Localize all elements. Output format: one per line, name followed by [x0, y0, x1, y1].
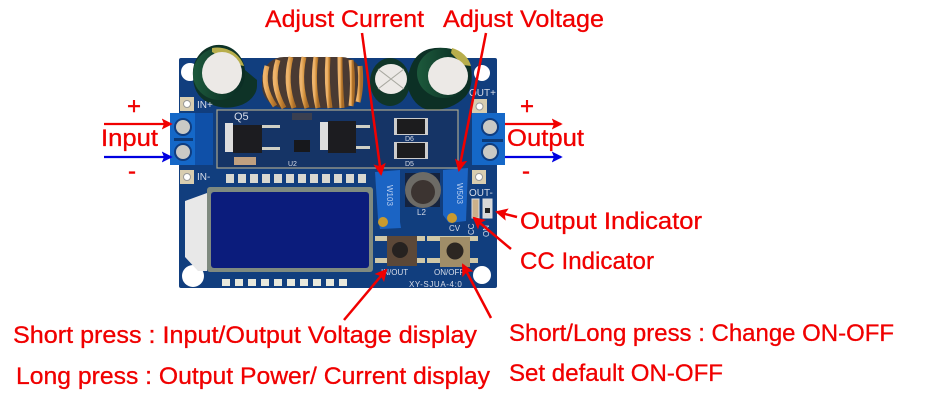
text: IN/OUT long press: Long press : Output Power/ Current display — [16, 363, 490, 390]
IN+ and IN- pads with silk labels — [180, 97, 213, 184]
board substrate — [179, 58, 497, 288]
LCD backlight tab — [185, 193, 207, 271]
arrow: Output Indicator — [497, 212, 517, 217]
IN/OUT push button — [375, 236, 425, 277]
diodes D6 and D5: D5 — [405, 161, 414, 168]
small resistor — [234, 157, 256, 165]
top LCD pin row — [226, 174, 366, 183]
voltage trimmer potentiometer: W503 — [455, 183, 464, 204]
input label — [101, 93, 158, 185]
text: ON/OFF short or long press: Short/Long press : Change ON-OFF — [509, 320, 894, 347]
OUT+ and OUT- pads with silk labels — [469, 88, 496, 199]
arrow: Adjust Voltage — [459, 33, 486, 170]
OUT+ and OUT- pads with silk labels: OUT- — [469, 188, 493, 199]
arrow: output positive — [505, 123, 561, 125]
output label: + — [520, 93, 534, 120]
input label: + — [127, 93, 141, 120]
board model text: XY-SJUA-4:0 — [409, 280, 462, 289]
callout: CC Indicator: CC Indicator — [520, 248, 654, 275]
input screw terminal — [170, 113, 213, 165]
text: set default: Set default ON-OFF — [509, 360, 723, 387]
output label: - — [522, 158, 530, 185]
large capacitor — [407, 48, 472, 110]
output label — [507, 93, 584, 185]
input label: - — [128, 158, 136, 185]
OUT+ and OUT- pads with silk labels: OUT+ — [469, 88, 496, 99]
mounting holes — [181, 63, 491, 287]
arrow: Adjust Current — [362, 33, 381, 174]
bottom LCD pin row — [222, 279, 347, 286]
heading: Adjust Current: Adjust Current — [265, 6, 424, 33]
indicator LEDs: CC — [467, 223, 476, 235]
Q5 transistor — [225, 111, 280, 153]
regulator U2: U2 — [288, 161, 297, 168]
input label: Input — [101, 125, 158, 152]
outlined component zone — [217, 110, 458, 168]
voltage trimmer potentiometer: CV — [449, 224, 461, 233]
arrow: input negative — [104, 156, 171, 158]
arrow: output negative — [505, 156, 561, 158]
indicator LEDs — [467, 199, 492, 237]
toroid inductor coil — [262, 57, 363, 108]
current inductor L2: L2 — [417, 208, 426, 217]
voltage trimmer potentiometer — [443, 168, 468, 233]
LCD screen — [207, 187, 373, 272]
arrow: ON/OFF button — [463, 265, 491, 318]
arrow: input positive — [104, 123, 171, 125]
current trimmer potentiometer: W103 — [385, 185, 394, 206]
callout: Output Indicator: Output Indicator — [520, 208, 702, 235]
output label: Output — [507, 125, 584, 152]
ON/OFF push button: ON/OFF — [434, 268, 464, 277]
second transistor — [320, 121, 370, 153]
small capacitor — [370, 58, 410, 106]
circuit board — [179, 45, 497, 289]
IN/OUT push button: IN/OUT — [381, 268, 408, 277]
IN+ and IN- pads with silk labels: IN- — [197, 172, 210, 183]
text: IN/OUT short press: Short press : Input/Output Voltage display — [13, 322, 477, 349]
arrow: CC Indicator — [474, 218, 511, 249]
left electrolytic capacitor — [193, 45, 257, 108]
arrow: IN/OUT button — [344, 270, 386, 320]
current inductor L2 — [405, 172, 441, 217]
diodes D6 and D5: D6 — [405, 136, 414, 143]
IN+ and IN- pads with silk labels: IN+ — [197, 100, 213, 111]
indicator LEDs: ON — [482, 225, 491, 237]
Q5 transistor: Q5 — [234, 111, 249, 123]
diodes D6 and D5 — [394, 118, 428, 168]
output screw terminal — [472, 113, 505, 165]
heading: Adjust Voltage: Adjust Voltage — [443, 6, 604, 33]
current trimmer potentiometer — [375, 170, 401, 229]
regulator U2 — [288, 113, 312, 168]
ON/OFF push button — [427, 236, 478, 277]
